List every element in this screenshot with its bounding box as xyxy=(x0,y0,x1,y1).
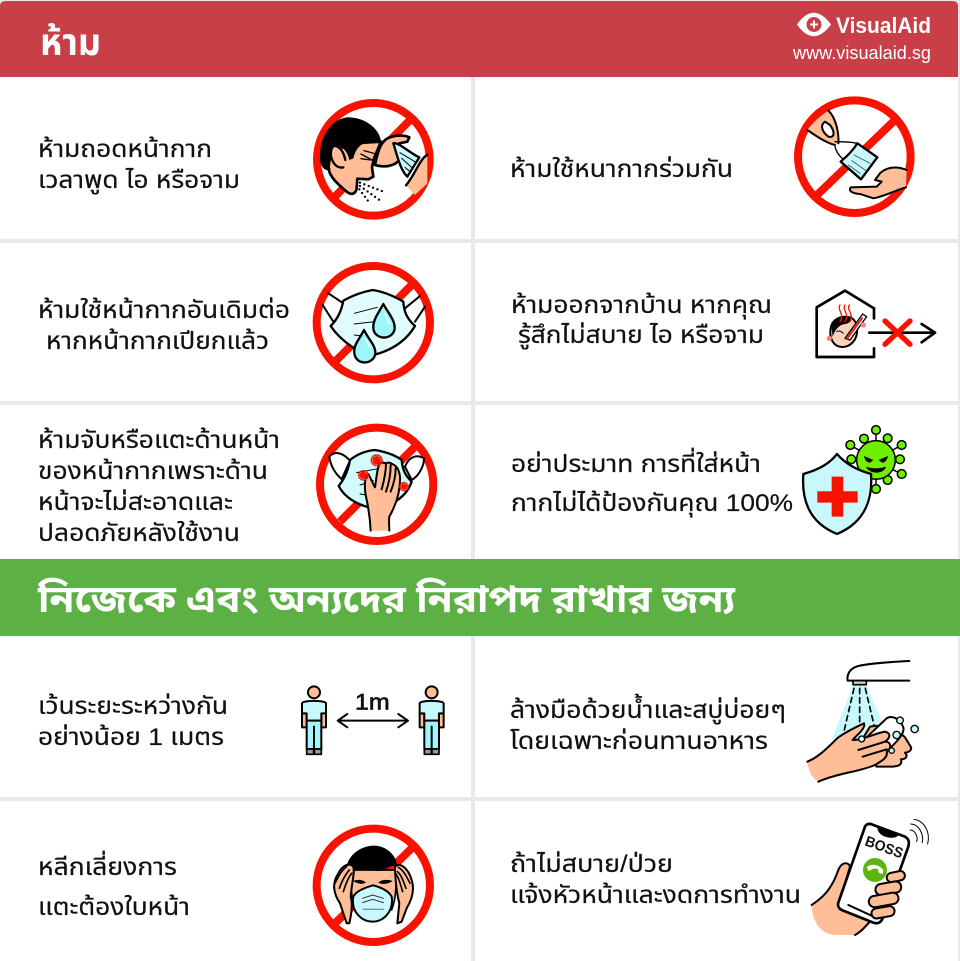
text: cell 5 xyxy=(38,427,280,547)
text: cell 4: ห้ามออกจากบ้าน หากคุณ xyxy=(511,292,772,320)
text: cell 9 xyxy=(38,850,190,921)
icon: stay home when sick xyxy=(817,291,935,357)
text: cell 5: หน้าจะไม่สะอาดและ xyxy=(38,488,233,516)
text: cell 10 xyxy=(510,850,801,909)
text: cell 10: แจ้งหัวหน้าและงดการทำงาน xyxy=(510,882,801,909)
panel: cell 4 xyxy=(475,243,958,401)
panel: cell 9 xyxy=(0,801,471,961)
icon: phone call to boss: BOSS xyxy=(863,834,905,862)
text: cell 1: เวลาพูด ไอ หรือจาม xyxy=(38,167,240,195)
text: cell 6: กากไม่ได้ป้องกันคุณ 100% xyxy=(511,489,793,518)
panel: cell 10 xyxy=(475,801,958,961)
arrow: double-headed xyxy=(338,714,408,727)
text: cell 5: ห้ามจับหรือแตะด้านหน้า xyxy=(38,427,280,454)
icon: one metre distance xyxy=(302,686,444,754)
text: cell 3 xyxy=(38,296,290,355)
text: cell 9: หลีกเลี่ยงการ xyxy=(38,850,177,881)
text: cell 1 xyxy=(38,136,240,195)
icon: wet mask xyxy=(317,266,430,379)
shield xyxy=(803,454,871,534)
text: cell 1: ห้ามถอดหน้ากาก xyxy=(38,136,212,163)
text: cell 4 xyxy=(511,292,772,350)
logo: VisualAid: www.visualaid.sg xyxy=(792,43,931,63)
virus xyxy=(846,426,906,493)
label: 1m: 1m xyxy=(355,689,390,714)
panel: cell 1 xyxy=(0,77,471,239)
icon: not touching face xyxy=(317,829,430,942)
panel: cell 8 xyxy=(475,636,958,797)
panel: cell 5 xyxy=(0,405,471,560)
green section heading xyxy=(0,559,960,636)
panel: cell 7 xyxy=(0,636,471,797)
text: cell 8 xyxy=(510,693,786,755)
panel: cell 2 xyxy=(475,77,958,239)
icon: removing mask while coughing xyxy=(317,103,430,216)
icon: phone call to boss xyxy=(812,819,928,935)
icon: virus and shield xyxy=(803,426,906,534)
red header band xyxy=(0,1,958,77)
icon: touching mask front xyxy=(320,428,433,541)
text: cell 8: โดยเฉพาะก่อนทานอาหาร xyxy=(510,727,768,755)
figure right xyxy=(420,686,444,754)
text: cell 9: แตะต้องใบหน้า xyxy=(38,894,190,921)
text: cell 3: หากหน้ากากเปียกแล้ว xyxy=(46,328,269,355)
text: cell 7: อย่างน้อย 1 เมตร xyxy=(38,723,224,751)
text: cell 7 xyxy=(38,692,228,751)
icon: sharing mask between hands xyxy=(798,100,911,213)
text: cell 6 xyxy=(511,447,793,518)
panel: cell 6 xyxy=(475,405,958,560)
text: cell 5: ของหน้ากากเพราะด้าน xyxy=(38,458,268,485)
text: cell 8: ล้างมือด้วยน้ำและสบู่บ่อยๆ xyxy=(510,693,786,725)
icon: hand washing xyxy=(807,661,918,782)
text: cell 6: อย่าประมาท การที่ใส่หน้า xyxy=(511,447,761,478)
text: cell 10: ถ้าไม่สบาย/ป่วย xyxy=(510,850,673,878)
text: cell 4: รู้สึกไม่สบาย ไอ หรือจาม xyxy=(518,321,764,350)
logo: VisualAid: VisualAid xyxy=(836,13,931,38)
green section heading: নিজেকে এবং অন্যদের নিরাপদ রাখার জন্য xyxy=(37,577,736,628)
text: cell 5: ปลอดภัยหลังใช้งาน xyxy=(38,520,240,547)
text: cell 3: ห้ามใช้หน้ากากอันเดิมต่อ xyxy=(38,296,290,324)
panel: cell 3 xyxy=(0,243,471,401)
text: cell 7: เว้นระยะระหว่างกัน xyxy=(38,692,228,720)
figure left xyxy=(302,686,326,754)
logo: VisualAid xyxy=(792,13,931,63)
text: cell 2: ห้ามใช้หนากากร่วมกัน xyxy=(510,155,733,183)
heading: do not: ห้าม xyxy=(40,22,101,63)
